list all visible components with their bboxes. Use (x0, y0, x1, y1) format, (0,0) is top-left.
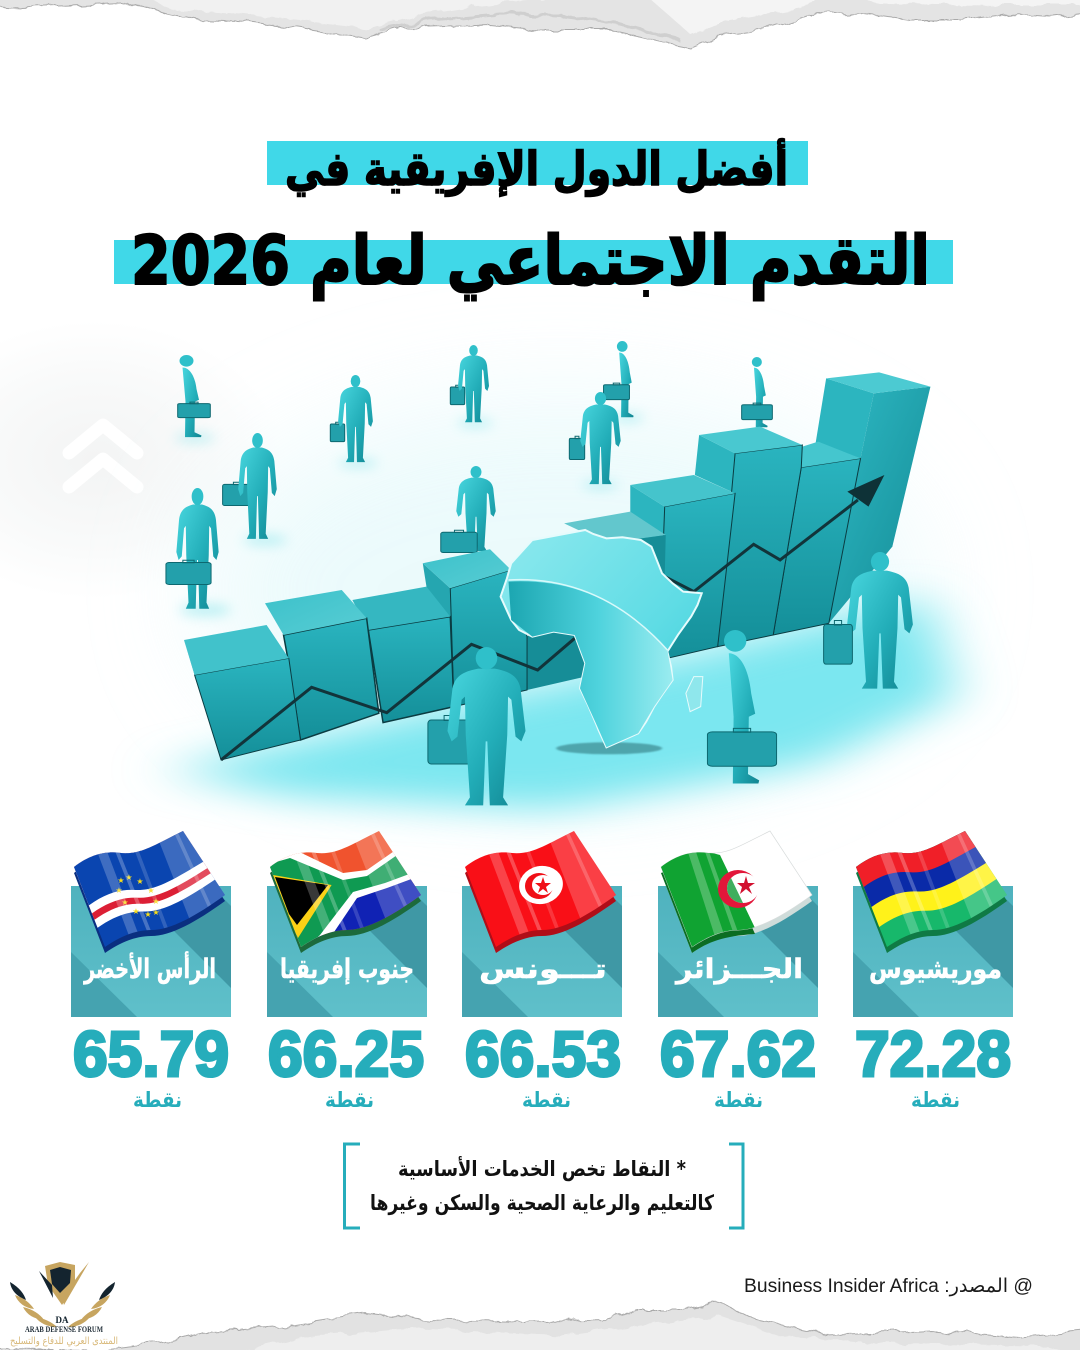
card: Mauritius (853, 831, 1013, 1107)
flag: Algeria (660, 830, 812, 953)
flag: Cape Verde: ★ (144, 910, 152, 919)
bar 1 (184, 625, 300, 760)
score: 66.53 (465, 1018, 621, 1090)
title: line 2: التقدم الاجتماعي لعام 2026 (131, 222, 930, 301)
flag: Cape Verde: ★ (136, 877, 144, 886)
score: 65.79 (73, 1018, 229, 1090)
bar 4 (423, 549, 527, 707)
bar chart (184, 372, 930, 760)
flag: Cape Verde: ★ (117, 876, 125, 885)
bar 7 (695, 427, 802, 647)
note line 2: كالتعليم والرعاية الصحية والسكن وغيرها (370, 1191, 715, 1215)
card background (462, 886, 622, 1017)
torn paper: bottom edge (0, 1302, 1080, 1350)
card: South Africa (267, 831, 427, 1107)
right bracket (729, 1144, 743, 1228)
card background (71, 886, 231, 1017)
unit: نقطة (325, 1088, 374, 1112)
flag: Mauritius (856, 831, 1007, 953)
flag: Cape Verde: ★ (147, 886, 155, 895)
flag: Cape Verde: ★ (152, 897, 160, 906)
score: 67.62 (660, 1018, 816, 1090)
flag: Cape Verde: ★ (132, 907, 140, 916)
card background (853, 886, 1013, 1017)
dark spike (39, 1271, 53, 1298)
wings (10, 1282, 115, 1327)
ground glow (162, 597, 956, 810)
bar 6 (630, 475, 735, 658)
torn paper: top edge (0, 0, 1080, 48)
figure shadows (175, 414, 644, 616)
country name: موريشيوس (869, 954, 1002, 985)
icon: double chevron up (69, 425, 137, 487)
note box (344, 1144, 743, 1228)
bar 2 (265, 590, 379, 740)
flag: Cape Verde: ★ (152, 908, 160, 917)
logo arabic text: المنتدى العربي للدفاع والتسليح (10, 1336, 118, 1347)
flag: Cape Verde: ★ (115, 886, 123, 895)
unit: نقطة (714, 1088, 763, 1112)
flag: South Africa (270, 831, 421, 953)
Africa map (501, 530, 703, 754)
unit: نقطة (911, 1088, 960, 1112)
left bracket (344, 1144, 360, 1228)
unit: نقطة (133, 1088, 182, 1112)
flag: Cape Verde: ★ (125, 873, 133, 882)
title: line 2 highlight (114, 240, 953, 284)
card background (658, 886, 818, 1017)
note line 1: * النقاط تخص الخدمات الأساسية (398, 1155, 686, 1181)
bar 5 (527, 512, 667, 690)
bar 8 (773, 442, 861, 635)
title: line 1: أفضل الدول الإفريقية في (285, 138, 788, 197)
flag: Cape Verde: ★ (121, 898, 129, 907)
illustration: bar chart with people and Africa map (162, 341, 956, 810)
score: 66.25 (268, 1018, 424, 1090)
logo english text: ARAB DEFENSE FORUM (25, 1325, 103, 1334)
figures in front of the bars (428, 552, 913, 805)
emblem letters: DA (56, 1315, 69, 1325)
country name: الجـــزائر (674, 954, 803, 985)
flag: Cape Verde (74, 831, 225, 953)
score: 72.28 (855, 1018, 1011, 1090)
bar 3 (352, 587, 454, 723)
figures standing behind the bars (166, 341, 772, 609)
unit: نقطة (522, 1088, 571, 1112)
soft grey glow behind chevrons (0, 320, 285, 600)
card: Cape Verde (71, 831, 231, 1107)
country name: جنوب إفريقيا (280, 954, 414, 985)
title: line 1 highlight (267, 141, 808, 185)
card: Algeria (648, 831, 818, 1112)
card background (267, 886, 427, 1017)
shield (45, 1262, 75, 1305)
gold spike (62, 1262, 89, 1305)
source: @ المصدر: Business Insider Africa (744, 1276, 1033, 1297)
country name: تـــونس (479, 954, 607, 985)
trend line and arrow (221, 475, 884, 760)
tallest bar (816, 372, 930, 623)
flag: Tunisia (465, 826, 622, 953)
logo: Arab Defense Forum (10, 1262, 118, 1347)
background wash (200, 400, 920, 780)
country name: الرأس الأخضر (83, 951, 216, 985)
card: Tunisia (462, 826, 622, 1112)
